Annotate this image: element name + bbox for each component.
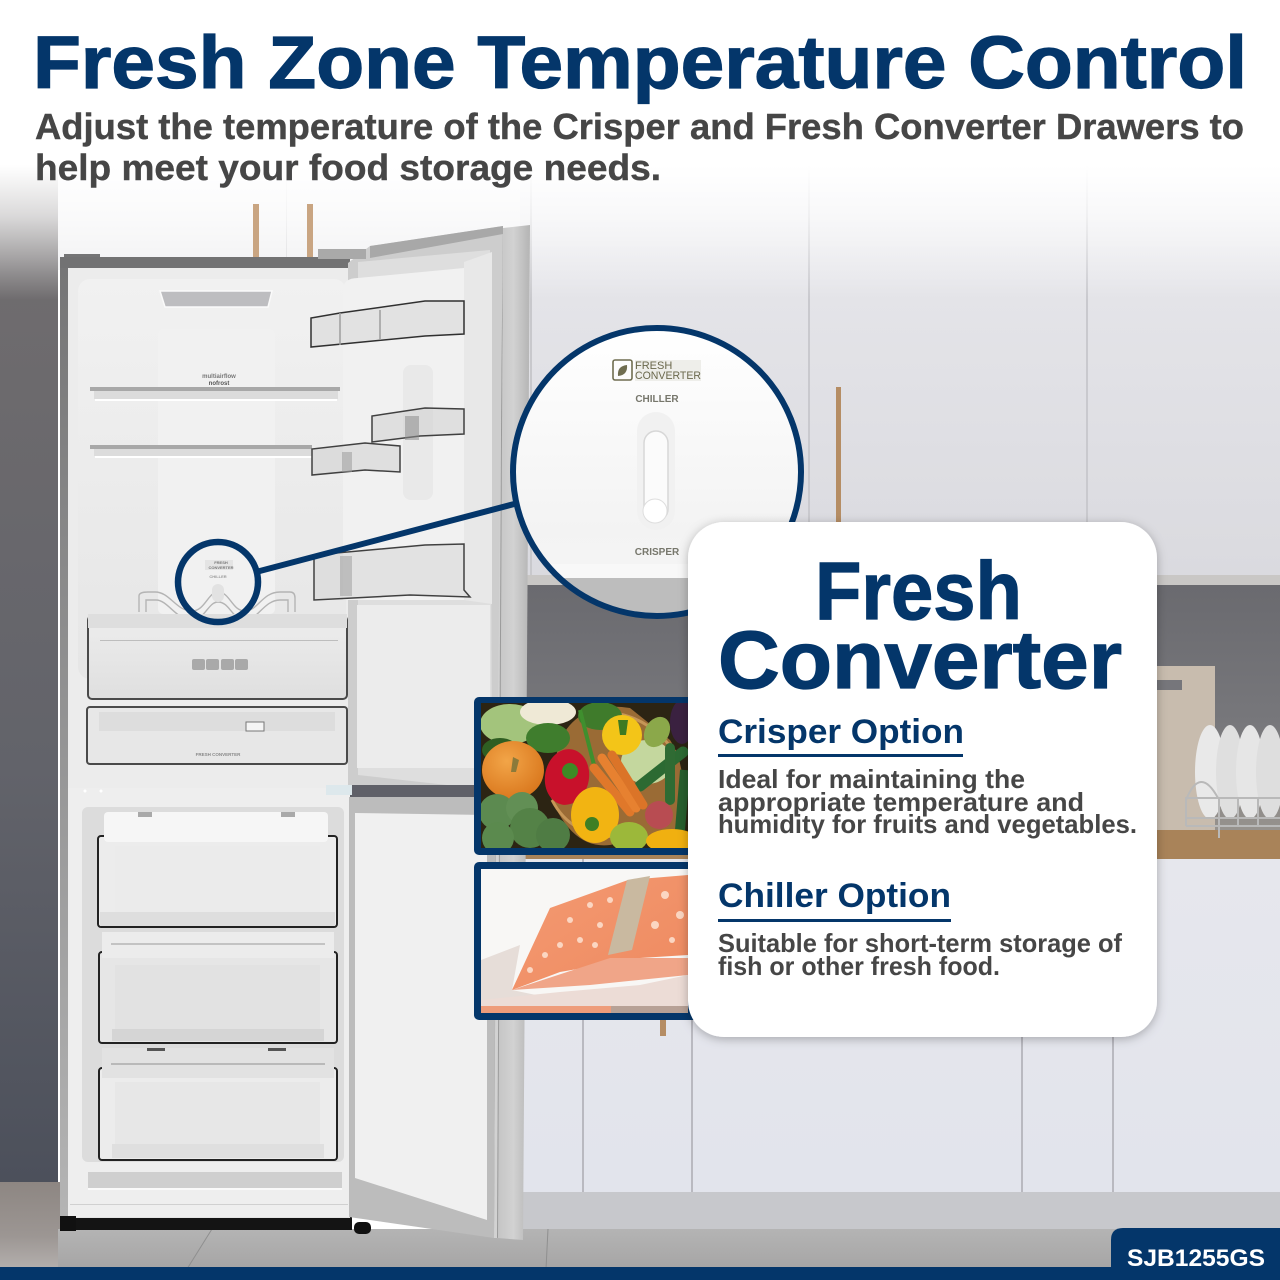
fresh converter drawer xyxy=(87,707,347,764)
lower door frame xyxy=(349,797,496,1238)
bottom bar xyxy=(0,1267,1280,1280)
small magnifier circle: CONVERTER xyxy=(208,565,234,570)
shelf 1 xyxy=(90,387,340,401)
subtitle: help meet your food storage needs. xyxy=(35,147,661,188)
chiller option: Suitable for short-term storage of xyxy=(718,928,1122,958)
door bin 3 xyxy=(312,443,400,475)
chiller option: Chiller Option xyxy=(718,877,951,915)
subtitle xyxy=(35,106,1244,188)
refrigerator xyxy=(60,225,530,1240)
fridge foot xyxy=(60,1216,76,1231)
small magnifier circle: FRESH xyxy=(214,560,228,565)
chiller label: CHILLER xyxy=(635,394,679,405)
cabinet handles above fridge xyxy=(253,204,313,260)
photo: vegetables xyxy=(474,697,698,855)
large magnifier circle xyxy=(510,328,810,628)
crisper option: Crisper Option xyxy=(718,713,964,751)
door caster xyxy=(354,1222,371,1234)
small magnifier circle xyxy=(178,542,258,622)
freezer drawer 1 xyxy=(98,812,337,927)
model tag: SJB1255GS xyxy=(1127,1245,1265,1272)
crisper label: CRISPER xyxy=(635,547,680,558)
crisper option: Ideal for maintaining the xyxy=(718,764,1025,794)
card heading xyxy=(718,546,1122,706)
photo: salmon xyxy=(474,862,698,1020)
freezer section xyxy=(68,788,350,1217)
fresh converter drawer: FRESH CONVERTER xyxy=(196,752,241,757)
card heading: Fresh xyxy=(815,546,1022,637)
door gasket gap xyxy=(350,785,498,798)
model tag xyxy=(1111,1228,1280,1280)
lower door panel xyxy=(355,813,487,1220)
info card xyxy=(688,522,1157,1037)
fridge shadow xyxy=(60,1216,352,1230)
connector line xyxy=(256,503,518,572)
small magnifier circle: CHILLER xyxy=(209,574,227,579)
upper door lower panel xyxy=(357,605,490,768)
chiller option: fish or other fresh food. xyxy=(718,951,1000,981)
shelf label: multiairflow xyxy=(202,374,236,380)
door bin 4 xyxy=(314,544,470,600)
upper door liner xyxy=(343,268,464,600)
door bin 2 xyxy=(372,408,464,442)
freezer drawer 3 xyxy=(99,1048,337,1160)
crisper option: humidity for fruits and vegetables. xyxy=(718,809,1137,839)
fresh converter logo: CONVERTER xyxy=(635,370,701,382)
chiller option xyxy=(718,877,1122,981)
control panel xyxy=(160,291,272,307)
crisper drawer xyxy=(88,614,347,699)
shelf 2 xyxy=(90,445,312,458)
refrigerator: nofrost xyxy=(209,381,229,387)
subtitle: Adjust the temperature of the Crisper and Fresh Converter Drawers to xyxy=(35,106,1244,147)
door bin 1 xyxy=(311,301,464,347)
upper door frame xyxy=(348,226,503,790)
top fade xyxy=(0,0,1280,300)
freezer drawer 2 xyxy=(99,932,337,1043)
crisper option: appropriate temperature and xyxy=(718,787,1084,817)
card heading: Converter xyxy=(718,615,1122,706)
cutting board and dish rack xyxy=(1157,666,1280,838)
wave ridge xyxy=(139,592,295,620)
title: Fresh Zone Temperature Control xyxy=(33,21,1247,104)
fresh converter logo: FRESH xyxy=(635,360,672,372)
crisper option xyxy=(718,713,1137,839)
door edge xyxy=(490,225,530,1240)
fridge body xyxy=(60,257,350,1218)
fresh converter logo xyxy=(613,360,701,382)
